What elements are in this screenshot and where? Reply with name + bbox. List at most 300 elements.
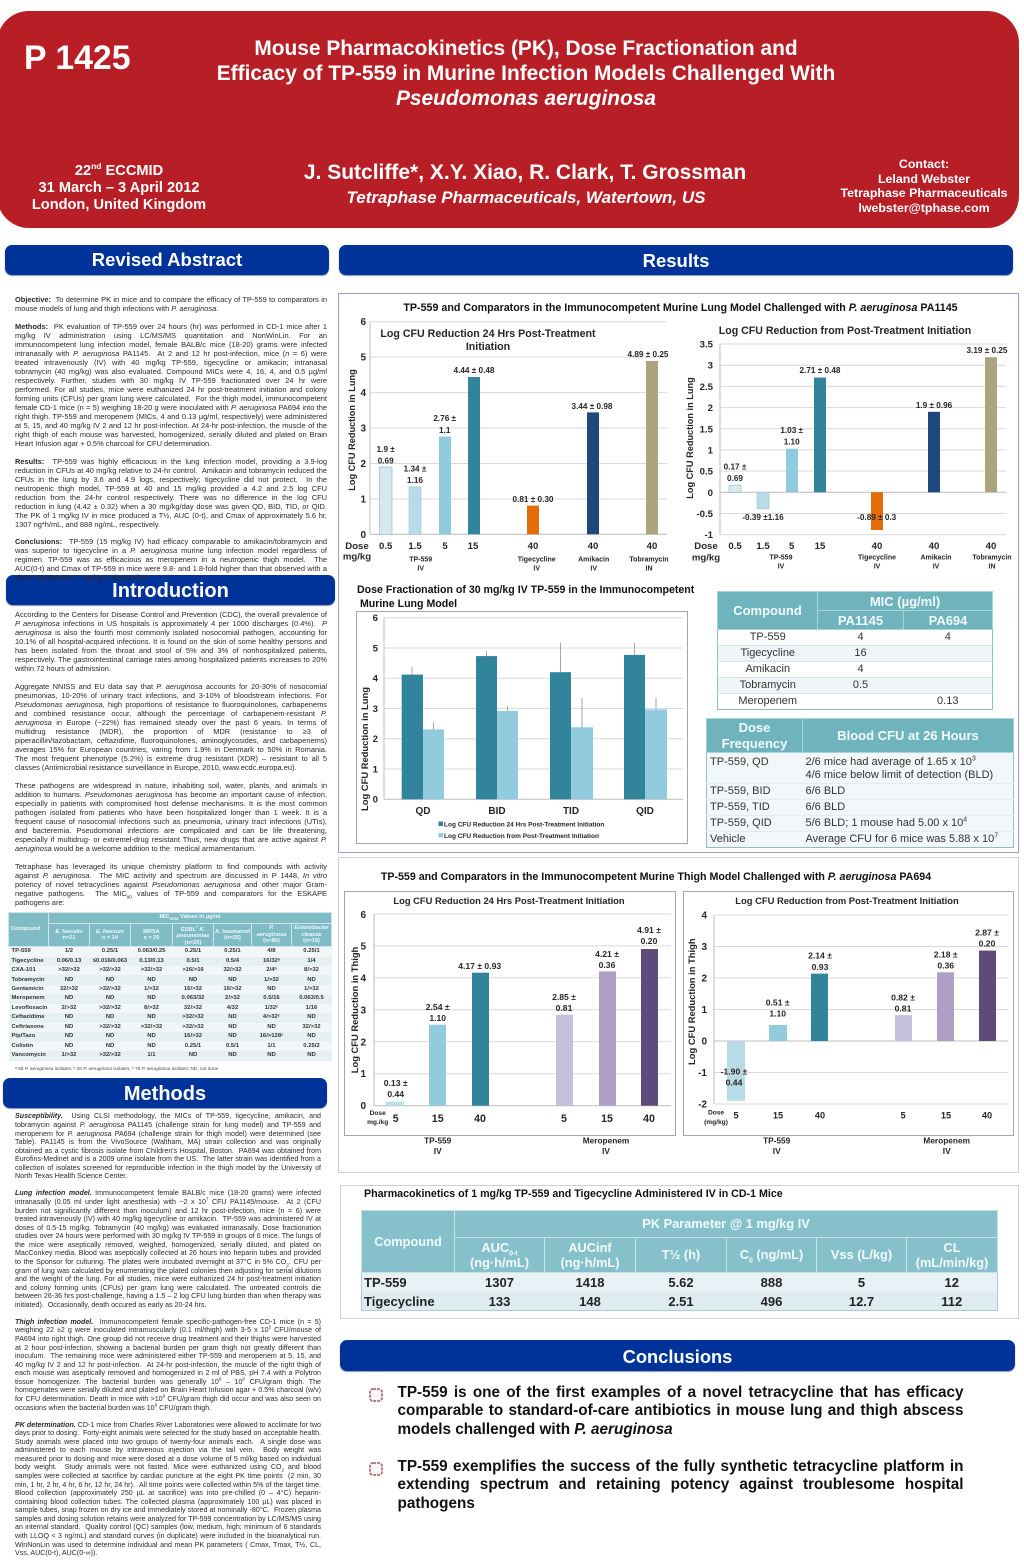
methods text: MacConkey media. Blood was aseptically collected at 26 hours into heparin tubes and provided (15, 1249, 321, 1257)
chart: lung log CFU reduction from treatment initiation: -0.39 ±1.16 (742, 513, 784, 522)
methods text: studies over 24 hours were performed with 30 mg/kg IV TP-559 in groups of 6 mice. The lungs of (15, 1232, 321, 1240)
contact (840, 157, 1008, 215)
abstract text: intranasally with P. aeruginosa PA1145. At 2 and 12 hr post-infection, mice (n = 6) were (15, 349, 327, 358)
chart: lung log CFU reduction 24 hrs: 1.9 ± (377, 445, 395, 454)
chart: lung log CFU reduction 24 hrs: 1.34 ± (404, 465, 427, 474)
chart: thigh log CFU reduction 24 hrs: 15 (601, 1113, 613, 1125)
methods text: meropenem for P. aeruginosa PA694 (challenge strain for thigh model) were determined (see (15, 1130, 321, 1138)
abstract text: treated intravenously (IV) with 40 mg/kg TP-559, tigecycline or amikacin; intranasal (15, 358, 327, 367)
chart: lung log CFU reduction from treatment initiation: Tobramycin (972, 554, 1012, 562)
chart: lung log CFU reduction 24 hrs: 15 (468, 541, 479, 552)
chart: thigh log CFU reduction 24 hrs: 0.20 (641, 936, 658, 946)
table: MIC50/90 for ESKAPE pathogens: 2/4ᵇ (266, 967, 277, 973)
table: blood CFU at 26 hours: TP-559, QD (710, 756, 769, 768)
abstract text: immunocompetent lung infection model, female BALB/c mice (18-20) grams were infected (15, 340, 327, 349)
table: MIC50/90 for ESKAPE pathogens: Tigecycline (12, 958, 43, 964)
introduction text: multidrug resistance (MDR), the proportion of MDR (resistance to ≥3 of (15, 727, 327, 736)
table: MIC50/90 for ESKAPE pathogens: ND (106, 1033, 114, 1039)
table: MIC50/90 for ESKAPE pathogens: 8/>32 (304, 967, 319, 973)
introduction text: pathogens are: (15, 898, 65, 907)
table footnote: ᵃ 55 P. aeruginosa isolates; ᵇ 20 P. aeruginosa isolates; ᶜ 78 P. aeruginosa isolates; ND, not done (15, 1067, 218, 1072)
panel: pharmacokinetics (340, 1185, 1019, 1319)
table: PK parameters: 1418 (576, 1275, 604, 1290)
introduction text: negative pathogens. The MIC90 values of TP-559 and comparators for the ESKAPE (15, 889, 327, 899)
table: PK parameters: (mL/min/kg) (916, 1255, 988, 1270)
table: MIC50/90 for ESKAPE pathogens: ND (106, 1043, 114, 1049)
table: MIC50/90 for ESKAPE pathogens: 0.25/1 (185, 1043, 201, 1049)
table: MIC50/90 for ESKAPE pathogens: ND (267, 986, 276, 992)
table: blood CFU at 26 hours: 6/6 BLD (806, 801, 845, 813)
chart: lung log CFU reduction from treatment initiation: Amikacin (920, 554, 952, 562)
chart: lung log CFU reduction 24 hrs: Tigecycline (518, 556, 556, 564)
chart: thigh log CFU reduction from treatment initiation: 3 (701, 942, 707, 953)
heading: introduction (6, 575, 335, 605)
chart: lung log CFU reduction from treatment initiation: Tigecycline (858, 554, 896, 562)
panel: lung model results (338, 293, 1019, 853)
chart: dose fractionation: TID (563, 806, 579, 817)
chart: dose fractionation: 1 (373, 764, 379, 775)
table: MIC50/90 for ESKAPE pathogens: ND (228, 1052, 237, 1058)
chart: dose fractionation: 5 (373, 643, 379, 654)
methods text: and colony forming units (CFUs) per gram lung were calculated. The untreated controls die (15, 1284, 321, 1292)
methods text: Eurofins-Medinet and is a 2009 urine isolate from the US. The latter strain was identified from a (15, 1155, 321, 1163)
chart: lung log CFU reduction from treatment initiation: 0.17 ± (724, 463, 747, 472)
table: MIC50/90 for ESKAPE pathogens: 0.5/1 (226, 1043, 239, 1049)
table: MIC by compound: Meropenem (738, 695, 797, 707)
chart: dose fractionation: 0 (373, 795, 378, 806)
table: PK parameters: (ng·h/mL) (560, 1255, 620, 1270)
table: MIC50/90 for ESKAPE pathogens: >32/>32 (141, 967, 162, 973)
table: MIC50/90 for ESKAPE pathogens: 2/>32 (62, 1005, 76, 1011)
contact: Tetraphase Pharmaceuticals (840, 186, 1008, 200)
table: MIC50/90 for ESKAPE pathogens: Compound (11, 926, 41, 932)
chart: thigh log CFU reduction from treatment initiation: -2 (698, 1100, 707, 1110)
methods text: each mouse was aseptically removed and homogenized in 2 ml of PBS, pH 7.4 with a Polytron (15, 1369, 321, 1377)
chart: lung log CFU reduction 24 hrs: Amikacin (578, 556, 609, 564)
chart: lung log CFU reduction from treatment initiation: -0.89 ± 0.3 (857, 513, 897, 522)
methods text: WinNonLin was used to determine individual and mean PK parameters ( Cmax, Tmax, T½, CL, (15, 1541, 321, 1549)
chart: lung log CFU reduction from treatment initiation: -1 (704, 530, 714, 541)
chart: thigh log CFU reduction 24 hrs: Log CFU Reduction 24 Hrs Post-Treatment Initiation (393, 895, 625, 906)
chart: thigh log CFU reduction 24 hrs: 0.44 (387, 1089, 404, 1099)
table: MIC50/90 for ESKAPE pathogens: ND (147, 1033, 156, 1039)
introduction text: and combined resistance occur, although the percentage of carbapenem-resistant P. (15, 709, 327, 718)
table: MIC50/90 for ESKAPE pathogens: 2/>32 (225, 995, 240, 1001)
chart: dose fractionation (356, 611, 688, 844)
heading: dose fractionation (357, 584, 694, 610)
chart: thigh log CFU reduction 24 hrs: IV (434, 1146, 442, 1156)
table: MIC50/90 for ESKAPE pathogens: MRSA (143, 929, 160, 935)
chart: thigh log CFU reduction from treatment initiation: -1.90 ± (721, 1067, 748, 1077)
table: MIC50/90 for ESKAPE pathogens: ND (267, 1024, 276, 1030)
chart: lung log CFU reduction 24 hrs (343, 317, 669, 572)
chart: lung log CFU reduction from treatment initiation: IV (778, 564, 785, 570)
table: MIC50/90 for ESKAPE pathogens: ND (228, 1014, 237, 1020)
table: MIC50/90 for ESKAPE pathogens: >32/>32 (99, 1052, 121, 1058)
chart: dose fractionation: 4 (373, 674, 379, 684)
abstract text: mg/kg IV administration using LC/MS/MS quantitation and NonWinLin. For an (15, 331, 327, 340)
heading: pharmacokinetics: Pharmacokinetics of 1 mg/kg TP-559 and Tigecycline Administered IV in CD-1 Mice (364, 1188, 783, 1200)
methods text: sample tubes, snap frozen on dry ice and immediately stored at nominally -80°C. Frozen plasma (15, 1506, 321, 1514)
conference info: 22nd ECCMID (75, 161, 163, 179)
table: MIC50/90 for ESKAPE pathogens: ND (106, 977, 114, 983)
abstract text: CFUs in the lung by 3.6 and 4.9 logs, respectively; tigecycline did not protect. In the (15, 475, 327, 484)
chart: lung log CFU reduction from treatment initiation: 0.69 (727, 474, 743, 483)
table: PK parameters: 12.7 (849, 1294, 874, 1308)
methods text: PA694 into right thigh. One group did not receive drug treatment and their thighs were harvested (15, 1335, 321, 1343)
abstract text: neutropenic thigh model, TP-559 at 40 and 15 mg/kg provided a 4.2 and 2.5 log CFU (15, 484, 327, 493)
table: MIC50/90 for ESKAPE pathogens: 16/32ᵃ (263, 958, 280, 964)
chart: thigh log CFU reduction 24 hrs: 4 (360, 974, 366, 984)
chart: lung log CFU reduction from treatment initiation: 1.9 ± 0.96 (916, 401, 953, 410)
abstract text: class comparator, 1 mg/kg IV tigecycline. (15, 573, 150, 582)
table: blood CFU at 26 hours: TP-559, QID (710, 817, 772, 829)
chart: thigh log CFU reduction from treatment initiation: 0.20 (979, 939, 996, 949)
table: MIC50/90 for ESKAPE pathogens: Pip/Tazo (12, 1033, 35, 1039)
chart: thigh log CFU reduction from treatment initiation: 0.44 (726, 1078, 743, 1088)
abstract text: tobramycin (40 mg/kg) was also evaluated. Compound MICs were 4, 16, 4, and 0.5 µg/ml (15, 367, 327, 376)
chart: thigh log CFU reduction from treatment initiation: -1 (698, 1068, 707, 1079)
chart: thigh log CFU reduction from treatment initiation: (mg/kg) (704, 1119, 728, 1126)
abstract text: reduction in lung (4.42 ± 0.32) when a 30 mg/kg/day dose was given QD, BID, TID, or QID. (15, 502, 327, 511)
title: Efficacy of TP-559 in Murine Infection Models Challenged With (217, 62, 835, 85)
chart: dose fractionation: 3 (373, 704, 378, 715)
table: MIC50/90 for ESKAPE pathogens: (n=19) (303, 938, 320, 944)
table: MIC by compound: Tigecycline (740, 647, 795, 659)
table: MIC50/90 for ESKAPE pathogens: ND (106, 1014, 114, 1020)
introduction text: piperacillin/tazobactam, ceftazidime, fluoroquinolones, aminoglycosides, and carbapenems) (15, 736, 327, 745)
chart: dose fractionation: Log CFU Reduction 24 Hrs Post-Treatment Initiation (444, 821, 604, 828)
chart: lung log CFU reduction 24 hrs: Log CFU Reduction in Lung (347, 369, 357, 491)
table: MIC by compound (717, 591, 993, 710)
abstract text: Methods: PK evaluation of TP-559 over 24 hours (hr) was performed in CD-1 mice after 1 (15, 322, 327, 331)
conference info: 31 March – 3 April 2012 (39, 180, 199, 196)
chart: thigh log CFU reduction 24 hrs: Log CFU Reduction in Thigh (349, 946, 360, 1073)
table: MIC50/90 for ESKAPE pathogens: Tobramycin (12, 977, 44, 983)
chart: lung log CFU reduction 24 hrs: 1 (360, 494, 366, 506)
chart: lung log CFU reduction 24 hrs: 0.69 (378, 456, 394, 466)
table: MIC50/90 for ESKAPE pathogens: 0.5/16 (263, 995, 280, 1001)
methods text: Thigh infection model. Immunocompetent female specific-pathogen-free CD-1 mice (n = 5) (15, 1318, 321, 1326)
table: MIC50/90 for ESKAPE pathogens: 16/>128ᶜ (260, 1033, 283, 1039)
chart: lung log CFU reduction from treatment initiation: IV (933, 564, 940, 570)
table: blood CFU at 26 hours: Blood CFU at 26 Hours (837, 728, 979, 743)
table: MIC50/90 for ESKAPE pathogens: ND (147, 995, 156, 1001)
chart: thigh log CFU reduction from treatment initiation: Log CFU Reduction from Post-Treatment Initiation (735, 895, 959, 906)
table: blood CFU at 26 hours: Dose (739, 720, 770, 735)
table: MIC50/90 for ESKAPE pathogens: >32/>32 (99, 1024, 121, 1030)
introduction text: 10.1% of all hospital-acquired infections. It is found on the skin of some healthy persons and (15, 637, 327, 646)
table: MIC50/90 for ESKAPE pathogens: 0.063/32 (182, 995, 204, 1001)
methods text: administered to each mouse by intravenous injection via the tail vein. Body weight was (15, 1446, 321, 1454)
table: MIC50/90 for ESKAPE pathogens: Enterobacter (294, 925, 329, 931)
chart: lung log CFU reduction 24 hrs: 2.76 ± (433, 414, 457, 423)
chart: thigh log CFU reduction 24 hrs: 1.10 (429, 1013, 446, 1023)
table: MIC50/90 for ESKAPE pathogens: ND (65, 995, 73, 1001)
table: MIC50/90 for ESKAPE pathogens: pneumoniae (177, 933, 209, 939)
table: MIC by compound: 4 (945, 631, 951, 643)
introduction text: These pathogens are widespread in nature, inhabiting soil, water, plants, and animals in (15, 781, 327, 790)
chart: thigh log CFU reduction from treatment initiation: 2.14 ± (808, 951, 832, 961)
table: MIC50/90 for ESKAPE pathogens: 4/>32ᶜ (263, 1014, 280, 1020)
table: MIC50/90 for ESKAPE pathogens: ND (307, 1014, 316, 1020)
chart: dose fractionation: Log CFU Reduction from Post-Treatment Initiation (444, 833, 599, 840)
abstract text: Heart Infusion agar + 0.5% charcoal for CFU determination. (15, 439, 211, 448)
heading: methods: Methods (124, 1083, 206, 1105)
methods text: gram of lung was calculated by enumerating the plated colonies then adjusting for serial dilutions (15, 1267, 321, 1275)
abstract text: The PK of 1 mg/kg IV in mice produced a T½, AUC (0-t), and Cmax of approximately 5.6 hr, (15, 511, 327, 520)
chart: lung log CFU reduction 24 hrs: Initiation (466, 341, 510, 353)
table: MIC by compound: 4 (857, 631, 864, 643)
methods text: occasions when the bacterial burden was 108 CFU/gram thigh. (15, 1402, 211, 1412)
chart: lung log CFU reduction 24 hrs: 4 (360, 388, 366, 399)
table: MIC50/90 for ESKAPE pathogens: 32/>32 (302, 1024, 321, 1030)
chart: thigh log CFU reduction 24 hrs: mg./kg (367, 1119, 388, 1126)
methods text: containing blood collection tubes. The collected plasma (approximately 100 µL) was placed in (15, 1498, 321, 1506)
chart: thigh log CFU reduction from treatment initiation: 0.36 (937, 961, 954, 971)
chart: thigh log CFU reduction 24 hrs: 2.85 ± (552, 992, 576, 1002)
title (217, 37, 835, 110)
table: MIC50/90 for ESKAPE pathogens: 1/32ᶜ (265, 1005, 278, 1011)
chart: lung log CFU reduction from treatment initiation: 1.10 (784, 438, 800, 447)
table: MIC by compound: PA694 (929, 612, 967, 628)
introduction text: Pseudomonas aeruginosa, high proportions of resistance to fluoroquinolones, carbapenems (15, 700, 327, 709)
methods text: Study animals were placed into two groups of twenty-four animals each. A single dose was (15, 1438, 321, 1446)
methods text: and the weight of the lung. For all studies, mice were euthanized 24 hr post-treatment initiation (15, 1275, 321, 1283)
table: MIC50/90 for ESKAPE pathogens: (n=25) (185, 940, 201, 946)
table: MIC50/90 for ESKAPE pathogens: 1/>32 (264, 977, 279, 983)
chart: thigh log CFU reduction 24 hrs: 5 (360, 942, 366, 953)
title: Mouse Pharmacokinetics (PK), Dose Fractionation and (254, 37, 798, 60)
chart: lung log CFU reduction 24 hrs: 3 (360, 424, 366, 434)
chart: lung log CFU reduction from treatment initiation: 1.03 ± (780, 426, 804, 435)
table: MIC50/90 for ESKAPE pathogens: >32/>32 (182, 1024, 204, 1030)
chart: thigh log CFU reduction 24 hrs: 0.13 ± (384, 1078, 408, 1088)
chart: thigh log CFU reduction from treatment initiation: IV (773, 1146, 781, 1156)
table: MIC50/90 for ESKAPE pathogens: 0.25/1 (303, 948, 320, 954)
chart: thigh log CFU reduction 24 hrs: 15 (432, 1113, 444, 1125)
table: MIC50/90 for ESKAPE pathogens: Meropenem (12, 995, 45, 1001)
chart: thigh log CFU reduction from treatment initiation: 1.10 (769, 1009, 786, 1019)
chart: thigh log CFU reduction 24 hrs: 3 (360, 1005, 366, 1016)
chart: thigh log CFU reduction from treatment initiation: 40 (815, 1110, 825, 1120)
table: PK parameters: T½ (h) (662, 1247, 700, 1262)
table: MIC50/90 for ESKAPE pathogens: 0.13/0.13 (139, 958, 164, 964)
table: MIC50/90 for ESKAPE pathogens: Ceftazidime (12, 1014, 45, 1020)
chart: lung log CFU reduction 24 hrs: 40 (588, 541, 598, 552)
methods text: Susceptibility. Using CLSI methodology, the MICs of TP-559, tigecycline, amikacin, and (15, 1112, 321, 1120)
abstract text: right thigh. TP-559 and meropenem (MICs, 4 and 0.13 µg/ml, respectively) were administered (15, 412, 327, 421)
table: PK parameters: 133 (489, 1294, 510, 1308)
chart: lung log CFU reduction 24 hrs: IV (417, 566, 424, 572)
table: MIC50/90 for ESKAPE pathogens: 0.25/2 (303, 1043, 320, 1049)
table: MIC50/90 for ESKAPE pathogens: ND (228, 1024, 237, 1030)
table: MIC by compound: Amikacin (745, 663, 790, 675)
abstract text: right thigh of each mouse was harvested, homogenized, serially diluted and plated on Brain (15, 430, 327, 439)
icon: conclusion bullet 2 (369, 1462, 383, 1476)
table: MIC by compound: Compound (733, 603, 802, 618)
table: MIC50/90 for ESKAPE pathogens: 1/16 (306, 1005, 317, 1011)
conclusion 1: models challenged with P. aeruginosa (398, 1421, 673, 1438)
abstract text: reduction in CFUs at 40 mg/kg relative to 24-hr control. Amikacin and tobramycin reduced the (15, 466, 327, 475)
chart: lung log CFU reduction from treatment initiation: mg/kg (692, 552, 720, 564)
table: MIC50/90 for ESKAPE pathogens: n = 14 (102, 935, 118, 941)
table: MIC50/90 for ESKAPE pathogens: ND (65, 1024, 73, 1030)
icon: conclusion bullet 1 (369, 1388, 383, 1402)
table: blood CFU at 26 hours: 5/6 BLD; 1 mouse had 5.00 x 104 (806, 816, 967, 829)
methods text: samples and dosing solution retains were analyzed for TP-599 concentration by LC/MS/MS using (15, 1515, 321, 1523)
chart: thigh log CFU reduction 24 hrs: 40 (474, 1113, 486, 1125)
abstract text: respectively. Further, studies with 30 mg/kg IV TP-559 fractionated over 24 hr were (15, 376, 327, 385)
chart: dose fractionation: QID (636, 806, 654, 817)
introduction text: respectively. The gastrointestinal carriage rates among hospitalized patients increases to 20% (15, 655, 327, 664)
chart: thigh log CFU reduction 24 hrs: Dose (370, 1110, 386, 1117)
abstract text: Conclusions: TP-559 (15 mg/kg IV) had efficacy comparable to amikacin/tobramycin and (15, 537, 327, 546)
table: MIC50/90 for ESKAPE pathogens: ND (228, 977, 237, 983)
table: MIC50/90 for ESKAPE pathogens: Colistin (12, 1043, 33, 1049)
chart: thigh log CFU reduction 24 hrs: 6 (360, 910, 366, 921)
chart: thigh log CFU reduction 24 hrs: 0.81 (556, 1003, 573, 1013)
table: MIC50/90 for ESKAPE pathogens: n = 20 (143, 935, 160, 941)
table: PK parameters: CL (944, 1240, 961, 1254)
table: blood CFU at 26 hours: Vehicle (710, 833, 745, 845)
chart: thigh log CFU reduction from treatment initiation: 0.82 ± (891, 993, 915, 1003)
chart: thigh log CFU reduction 24 hrs: 0 (360, 1101, 366, 1112)
table: MIC50/90 for ESKAPE pathogens: 8/>32 (144, 1005, 159, 1011)
abstract text: mouse models of lung and thigh infections with P. aeruginosa. (15, 304, 218, 313)
table: MIC50/90 for ESKAPE pathogens: 0.25/1 (102, 948, 118, 954)
introduction text (15, 610, 327, 907)
table: MIC50/90 for ESKAPE pathogens: >16/>16 (182, 967, 204, 973)
chart: lung log CFU reduction from treatment initiation: 15 (815, 541, 826, 552)
chart: lung log CFU reduction 24 hrs: IN (646, 566, 652, 572)
table: PK parameters: (ng·h/mL) (470, 1255, 529, 1270)
methods text: the mice were aseptically removed, weighed, homogenized, serially diluted, and plated on (15, 1241, 321, 1249)
table: MIC50/90 for ESKAPE pathogens: ND (307, 1033, 316, 1039)
chart: thigh log CFU reduction from treatment initiation: Meropenem (923, 1136, 970, 1146)
conclusion 2: TP-559 exemplifies the success of the fully synthetic tetracycline platform in (398, 1458, 964, 1475)
abstract text: at 5, 15, and 40 mg/kg IV 2 and 12 hr post-infection. At 24-hr post-infection, the muscle of the (15, 421, 327, 430)
table: MIC50/90 for ESKAPE pathogens: 32/>32 (60, 986, 78, 992)
methods text: body weight. Study animals were not fasted. Mice were euthanized using CO2 and blood (15, 1463, 321, 1473)
chart: thigh log CFU reduction 24 hrs: 4.17 ± 0.93 (458, 961, 501, 971)
introduction text: averages 15% for European countries, varing from 1.9% in Denmark to 50% in Romania. (15, 745, 327, 754)
table: MIC50/90 for ESKAPE pathogens: 16/>32 (184, 1033, 202, 1039)
table: MIC50/90 for ESKAPE pathogens: (n=25) (224, 935, 241, 941)
methods text: for CFU determination. Death in mice with >109 CFU/gram thigh did occur and was also seen on (15, 1394, 321, 1403)
table: PK parameters: AUCinf (568, 1240, 612, 1254)
introduction text: potency of novel tetracyclines against Pseudomonas aeruginosa and other major Gram- (15, 880, 327, 889)
table: MIC50/90 for ESKAPE pathogens: ND (189, 977, 197, 983)
heading: dose fractionation: Murine Lung Model (360, 598, 457, 610)
chart: thigh log CFU reduction from treatment initiation: 5 (733, 1110, 739, 1120)
methods text: tobramycin against P. aeruginosa PA1145 (challenge strain for lung model) and TP-559 and (15, 1121, 321, 1129)
heading: methods (3, 1078, 327, 1108)
chart: lung log CFU reduction from treatment initiation: 2.5 (700, 382, 714, 393)
table: blood CFU at 26 hours: 2/6 mice had average of 1.65 x 103 (806, 755, 976, 768)
heading: conclusions (340, 1340, 1015, 1371)
table: MIC50/90 for ESKAPE pathogens: A. baumannii (215, 929, 250, 935)
methods text: doses of 0.5-15 mg/kg. Tobramycin (40 mg/kg) was evaluated intranasally. Dose fractionation (15, 1224, 321, 1232)
title: Pseudomonas aeruginosa (396, 87, 656, 110)
chart: lung log CFU reduction 24 hrs: 6 (360, 317, 366, 328)
chart: dose fractionation: BID (488, 806, 506, 817)
table: MIC50/90 for ESKAPE pathogens: (n=86) (263, 938, 280, 944)
heading: dose fractionation: Dose Fractionation of 30 mg/kg IV TP-559 in the Immunocompetent (357, 584, 694, 596)
chart: thigh log CFU reduction 24 hrs: 2.54 ± (426, 1002, 450, 1012)
chart: lung log CFU reduction from treatment initiation: 40 (986, 541, 996, 552)
methods text: Blood collection (approximately 250 µL at sacrifice) was into pre-chilled (0 – 4°C) heparin- (15, 1489, 321, 1497)
chart: lung log CFU reduction from treatment initiation: 3 (708, 361, 713, 372)
chart: thigh log CFU reduction from treatment initiation: 2.18 ± (934, 950, 958, 960)
methods text: with LLOQ < 3 ng/mL) and standard curves (in duplicate) were included in the bioanalytical run. (15, 1532, 321, 1540)
chart: thigh log CFU reduction from treatment initiation: Dose (708, 1110, 724, 1116)
chart: lung log CFU reduction 24 hrs: 0.81 ± 0.30 (513, 495, 554, 504)
conclusion 1: TP-559 is one of the first examples of a novel tetracycline that has efficacy (398, 1384, 964, 1401)
contact: lwebster@tphase.com (858, 201, 990, 215)
introduction text: Aggregate NNISS and EU data say that P. aeruginosa accounts for 20-30% of nosocomial (15, 682, 327, 691)
table: MIC50/90 for ESKAPE pathogens: 4/32 (227, 1005, 238, 1011)
table: MIC50/90 for ESKAPE pathogens: 0.5/4 (226, 958, 239, 964)
heading: results: Results (643, 250, 709, 271)
table: MIC50/90 for ESKAPE pathogens: 16/>32 (223, 986, 242, 992)
methods text: burden not significantly different than inoculum) and 12 hr post-infection, mice (n = 6) were (15, 1207, 321, 1215)
table: MIC50/90 for ESKAPE pathogens: TP-559 (12, 948, 31, 954)
table: PK parameters: Vss (L/kg) (831, 1247, 892, 1262)
methods text: at 2 hour post-infection, showing a bacterial burden per gram thigh not greatly different than (15, 1344, 321, 1352)
table: MIC50/90 for ESKAPE pathogens: 0.063/0.5 (299, 995, 324, 1001)
introduction text: frequent cause of nosocomial infections such as pneumonia, urinary tract infections (UTIs), (15, 817, 327, 826)
table: MIC50/90 for ESKAPE pathogens: ND (228, 1033, 237, 1039)
methods text: Vss, AUC(0-t), AUC(0-∞)). (15, 1549, 97, 1557)
chart: thigh log CFU reduction from treatment initiation: 2 (701, 974, 707, 984)
table: MIC50/90 for ESKAPE pathogens: E. faecium (96, 929, 124, 935)
table: PK parameters: 112 (941, 1294, 962, 1308)
table: PK parameters: 5 (858, 1275, 865, 1290)
chart: lung log CFU reduction from treatment initiation: TP-559 (770, 554, 793, 562)
chart: thigh log CFU reduction from treatment initiation: TP-559 (763, 1136, 791, 1146)
methods text: collection of isolates screened for reproducible infection in the thigh model by the University of (15, 1164, 321, 1172)
methods text: PK determination. CD-1 mice from Charles River Laboratories were allowed to acclimate for two (15, 1421, 321, 1429)
table: MIC50/90 for ESKAPE pathogens: 1/>32 (62, 1052, 76, 1058)
chart: thigh log CFU reduction 24 hrs: 1 (360, 1069, 366, 1080)
chart: thigh log CFU reduction from treatment initiation (683, 891, 1014, 1156)
methods text: between 26-36 hrs post-challenge, having a 1.5 – 2 log CFU lung burden than when therapy was (15, 1292, 321, 1300)
table: MIC50/90 for ESKAPE pathogens: Vancomycin (12, 1052, 46, 1058)
table: blood CFU at 26 hours: Frequency (722, 736, 787, 750)
table: MIC50/90 for ESKAPE pathogens: 0.25/1 (224, 948, 241, 954)
table: MIC50/90 for ESKAPE pathogens: 1/4 (307, 958, 316, 964)
introduction text: aeruginosa is also the fourth most commonly isolated nosocomial pathogen, accounting for (15, 628, 327, 637)
methods text: samples were collected at sacrifice by cardiac puncture at the eight PK time points (2 min, 30 (15, 1472, 321, 1480)
abstract text: regimen. TP-559 was as efficacious as meropenem in a neutropenic thigh model. The (15, 555, 327, 564)
introduction text: pathogen isolated from patients who have been hospitalized longer than 1 week. It is a (15, 808, 327, 817)
introduction text: and bacteremia. Pseudomonal infections are complicated and can be life threatening, (15, 826, 327, 835)
table: MIC50/90 for ESKAPE pathogens: n=21 (63, 935, 75, 941)
heading: introduction: Introduction (112, 580, 229, 602)
table: PK parameters: C0 (ng/mL) (740, 1247, 803, 1265)
chart: lung log CFU reduction 24 hrs: TP-559 (409, 556, 432, 564)
chart: lung log CFU reduction from treatment initiation: 1.5 (700, 424, 714, 435)
chart: thigh log CFU reduction from treatment initiation: 0 (701, 1036, 707, 1048)
chart: thigh log CFU reduction from treatment initiation: 2.87 ± (975, 928, 999, 938)
table: PK parameters: Compound (374, 1234, 442, 1249)
conclusion 2: pathogens (398, 1495, 475, 1512)
chart: thigh log CFU reduction 24 hrs: IV (602, 1146, 610, 1156)
table: MIC50/90 for ESKAPE pathogens: 32/>32 (223, 967, 242, 973)
table: MIC50/90 for ESKAPE pathogens: P. (269, 925, 274, 931)
contact: Leland Webster (878, 172, 970, 186)
